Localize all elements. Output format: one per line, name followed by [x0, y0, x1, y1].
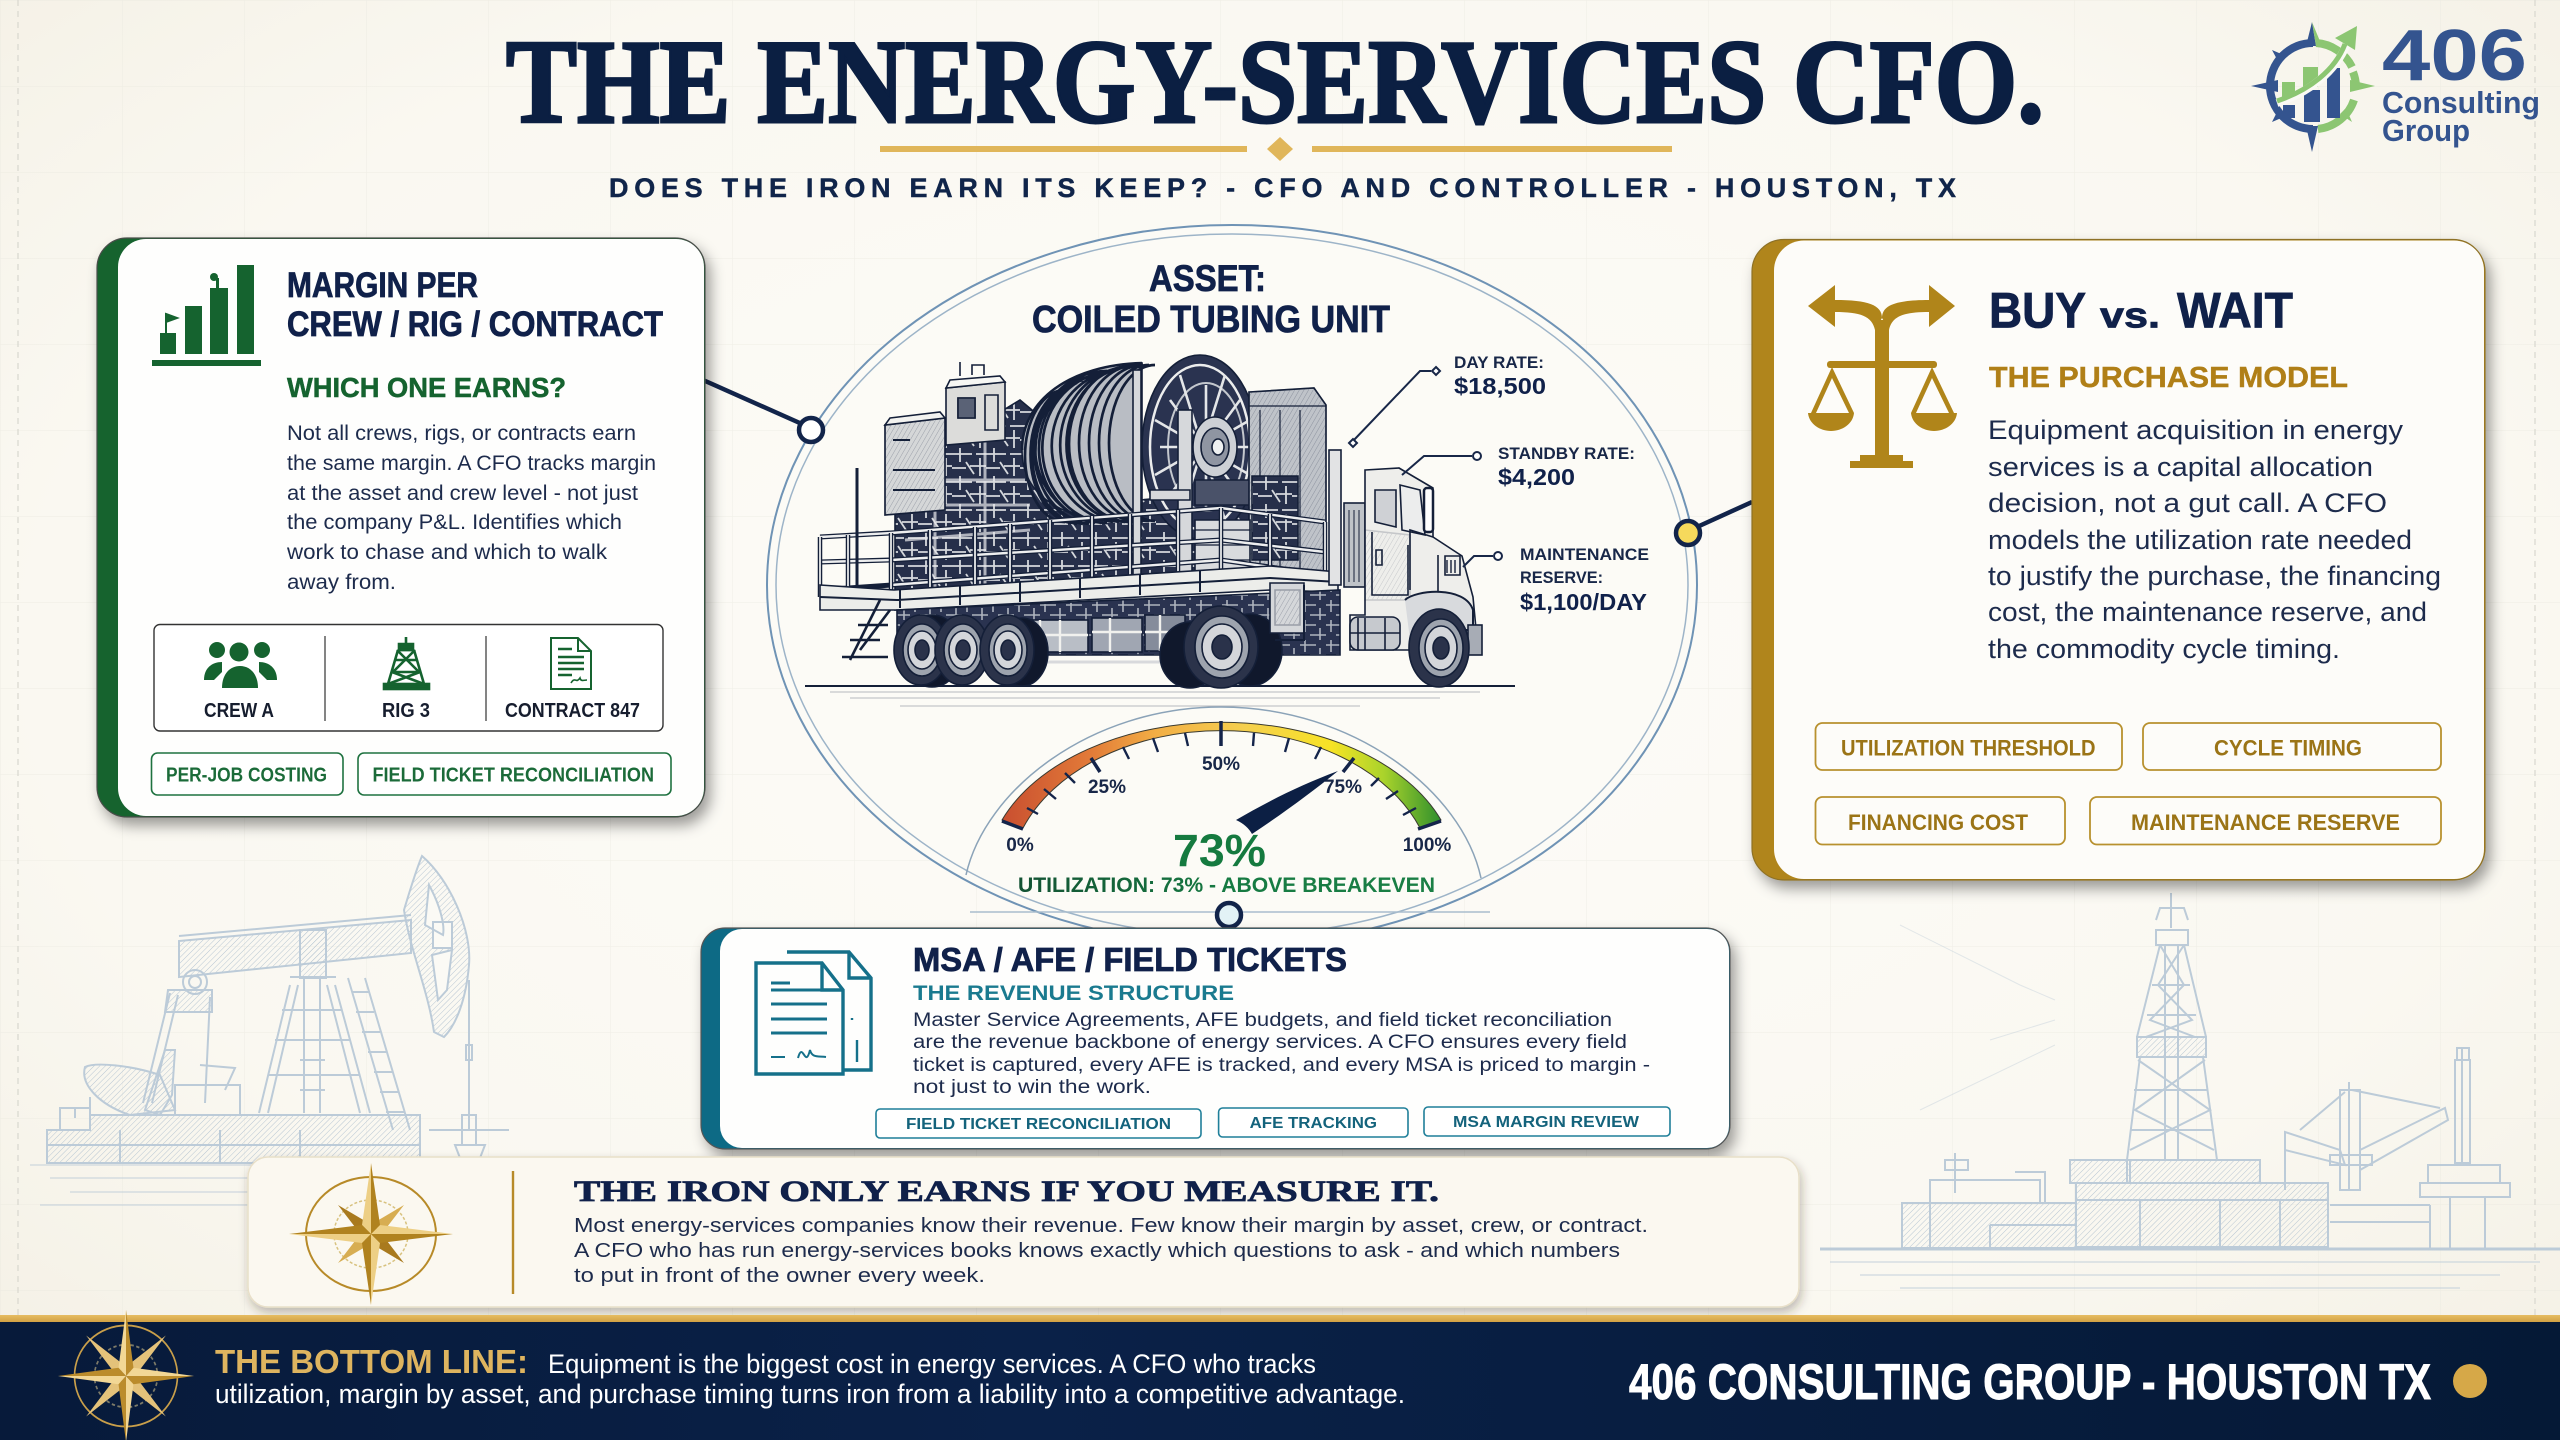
exhaust stack and muffler	[1329, 450, 1365, 587]
callout: day rate: DAY RATE:	[1454, 353, 1544, 372]
icon: bar chart	[152, 265, 261, 366]
body text	[286, 422, 656, 594]
subtitle: DOES THE IRON EARN ITS KEEP? - CFO AND CONTROLLER - HOUSTON, TX	[609, 173, 1956, 203]
card body	[248, 1157, 1799, 1307]
chip: per-job costing: PER-JOB COSTING	[166, 764, 327, 786]
callout: standby rate	[1402, 444, 1635, 490]
panel: MSA AFE field tickets	[701, 928, 1730, 1149]
comparison box	[154, 624, 663, 731]
asset heading: ASSET:	[1149, 258, 1266, 299]
chip: maintenance reserve	[2090, 797, 2441, 844]
background sketch: offshore rig	[1820, 893, 2560, 1288]
body text: to put in front of the owner every week.	[574, 1265, 985, 1287]
connector: ellipse to buy vs wait card	[1676, 502, 1752, 545]
heading: CREW / RIG / CONTRACT	[287, 305, 663, 344]
heading	[1989, 282, 2293, 338]
chip: field ticket reconciliation	[358, 753, 671, 795]
gold divider	[880, 137, 1672, 161]
body text	[1988, 415, 2441, 664]
heading: BUY	[1989, 282, 2086, 338]
divider	[512, 1171, 514, 1294]
gauge labels: 25%	[1088, 777, 1126, 798]
subheading: THE PURCHASE MODEL	[1989, 362, 2348, 394]
gauge caption: UTILIZATION: 73% - ABOVE BREAKEVEN	[1018, 874, 1435, 897]
panel: the iron only earns	[248, 1157, 1799, 1307]
gold dot	[2453, 1364, 2487, 1398]
chip: field ticket reconciliation	[876, 1109, 1201, 1138]
rear wheels	[894, 615, 1048, 687]
logo wordmark	[2382, 16, 2540, 148]
callout: standby rate: STANDBY RATE:	[1498, 444, 1635, 463]
chip: per-job costing	[152, 753, 343, 795]
card body	[1752, 240, 2485, 880]
heading: THE IRON ONLY EARNS IF YOU MEASURE IT.	[574, 1175, 1439, 1208]
cab	[1350, 468, 1482, 655]
gauge value: 73%	[1173, 825, 1266, 876]
gauge ticks	[1002, 721, 1441, 829]
middle wheels	[1160, 606, 1282, 688]
reel flange	[1142, 355, 1258, 539]
callout: maintenance reserve	[1463, 545, 1649, 615]
body text: models the utilization rate needed	[1988, 525, 2412, 555]
icon: contract	[551, 638, 591, 689]
body text: work to chase and which to walk	[286, 541, 608, 564]
chip: financing cost: FINANCING COST	[1848, 810, 2029, 835]
chip: utilization threshold	[1816, 723, 2122, 770]
heading: MARGIN PER	[287, 266, 478, 305]
utilization gauge	[966, 707, 1490, 912]
icon: crew	[204, 642, 277, 688]
title: THE ENERGY-SERVICES CFO.	[506, 15, 2044, 148]
bottom line message	[215, 1343, 1405, 1409]
body text: at the asset and crew level - not just	[287, 482, 638, 505]
chassis and tool boxes	[897, 590, 1340, 662]
front wheel	[1409, 609, 1469, 687]
chip: msa margin review: MSA MARGIN REVIEW	[1453, 1114, 1640, 1131]
background sketch: pump jack	[30, 856, 560, 1205]
machinery pipes	[905, 430, 1030, 600]
chip: financing cost	[1816, 797, 2065, 844]
machinery mass	[895, 400, 1255, 610]
icon: scales and forked arrows	[1808, 285, 1957, 468]
asset heading	[1032, 258, 1390, 341]
logo wordmark: Group	[2382, 113, 2470, 148]
mud flap	[1270, 583, 1304, 633]
body text: not just to win the work.	[913, 1077, 1151, 1098]
chip: maintenance reserve: MAINTENANCE RESERVE	[2131, 810, 2400, 835]
icon: compass rose	[289, 1163, 453, 1305]
icon: documents	[756, 952, 871, 1074]
chip: field ticket reconciliation: FIELD TICKET RECONCILIATION	[906, 1116, 1171, 1133]
central asset ellipse	[767, 225, 1697, 945]
label: contract 847: CONTRACT 847	[505, 700, 640, 722]
subheading: WHICH ONE EARNS?	[287, 372, 566, 403]
bottom line message: utilization, margin by asset, and purchase timing turns iron from a liability into a competitive advantage.	[215, 1379, 1405, 1409]
body text: Master Service Agreements, AFE budgets, and field ticket reconciliation	[913, 1010, 1612, 1031]
coil drum	[1022, 363, 1155, 524]
footer background	[0, 1315, 2560, 1440]
chip: utilization threshold: UTILIZATION THRESHOLD	[1841, 736, 2096, 760]
body text	[913, 1010, 1650, 1098]
body text: ticket is captured, every AFE is tracked, and every MSA is priced to margin -	[913, 1055, 1650, 1076]
gauge labels: 100%	[1403, 835, 1451, 856]
icon: rig	[384, 637, 429, 689]
gauge labels: 75%	[1324, 777, 1362, 798]
connector: margin card to ellipse	[703, 380, 823, 442]
card body	[701, 928, 1730, 1149]
body text: away from.	[287, 571, 396, 594]
card body	[97, 238, 705, 817]
gauge labels: 0%	[1006, 835, 1034, 856]
bottom line message: THE BOTTOM LINE:	[215, 1343, 528, 1380]
reel uprights	[1133, 370, 1255, 587]
safety railing	[820, 508, 1325, 608]
chip: afe tracking	[1219, 1108, 1408, 1137]
callout: day rate: $18,500	[1454, 373, 1546, 399]
asset heading: COILED TUBING UNIT	[1032, 299, 1390, 341]
right-hand tank	[1195, 388, 1326, 578]
icon: footer compass	[58, 1310, 194, 1440]
gauge needle	[1236, 771, 1338, 834]
chip: afe tracking: AFE TRACKING	[1250, 1115, 1377, 1132]
rear mast	[856, 468, 858, 587]
bottom line message: Equipment is the biggest cost in energy services. A CFO who tracks	[548, 1349, 1316, 1379]
body text	[574, 1215, 1648, 1287]
label: crew a: CREW A	[204, 700, 274, 722]
callout: maintenance reserve: MAINTENANCE	[1520, 545, 1649, 564]
body text: Not all crews, rigs, or contracts earn	[287, 422, 636, 445]
rear access ladder	[842, 600, 890, 660]
body text: A CFO who has run energy-services books knows exactly which questions to ask - and which numbers	[574, 1240, 1620, 1262]
chip: cycle timing: CYCLE TIMING	[2214, 736, 2362, 760]
body text: the same margin. A CFO tracks margin	[287, 452, 656, 475]
panel: buy vs wait	[1752, 240, 2485, 880]
gauge labels	[1006, 754, 1451, 856]
body text: the commodity cycle timing.	[1988, 634, 2340, 664]
gauge colour band	[1002, 722, 1441, 828]
body text: decision, not a gut call. A CFO	[1988, 488, 2387, 518]
connector: ellipse to revenue card	[1217, 903, 1241, 945]
label: rig 3: RIG 3	[382, 700, 430, 722]
gauge labels: 50%	[1202, 754, 1240, 775]
logo wordmark: 406	[2382, 16, 2527, 96]
footer band	[0, 1310, 2560, 1440]
heading: WAIT	[2177, 282, 2293, 338]
leader line	[1402, 452, 1481, 475]
leader line	[1463, 552, 1502, 567]
callout: day rate	[1349, 353, 1546, 447]
heading	[287, 266, 663, 344]
body text: the company P&L. Identifies which	[287, 511, 622, 534]
coiled tubing truck illustration	[805, 355, 1515, 706]
chip: msa margin review	[1424, 1107, 1670, 1136]
body text: services is a capital allocation	[1988, 452, 2373, 482]
callout: maintenance reserve: $1,100/DAY	[1520, 589, 1647, 615]
body text: to justify the purchase, the financing	[1988, 561, 2441, 591]
subheading: THE REVENUE STRUCTURE	[913, 982, 1234, 1005]
truck ground	[805, 685, 1515, 687]
flatbed deck	[820, 566, 1338, 610]
body text: cost, the maintenance reserve, and	[1988, 597, 2427, 627]
callout: maintenance reserve: RESERVE:	[1520, 568, 1603, 587]
logo wordmark: Consulting	[2382, 85, 2540, 120]
panel: margin per crew rig contract	[97, 238, 705, 817]
logo mark	[2251, 22, 2375, 152]
heading: vs.	[2100, 294, 2160, 336]
chip: cycle timing	[2143, 723, 2441, 770]
callout: standby rate: $4,200	[1498, 464, 1575, 490]
body text: Most energy-services companies know their revenue. Few know their margin by asset, crew, or contract.	[574, 1215, 1648, 1237]
engine housing	[885, 412, 945, 515]
chip: field ticket reconciliation: FIELD TICKET RECONCILIATION	[372, 764, 654, 786]
logo: 406 Consulting Group	[2251, 16, 2540, 152]
body text: Equipment acquisition in energy	[1988, 415, 2404, 445]
upper control cabin	[946, 362, 1005, 445]
body text: are the revenue backbone of energy services. A CFO ensures every field	[913, 1032, 1627, 1053]
heading: MSA / AFE / FIELD TICKETS	[913, 941, 1347, 978]
leader line	[1349, 367, 1440, 447]
